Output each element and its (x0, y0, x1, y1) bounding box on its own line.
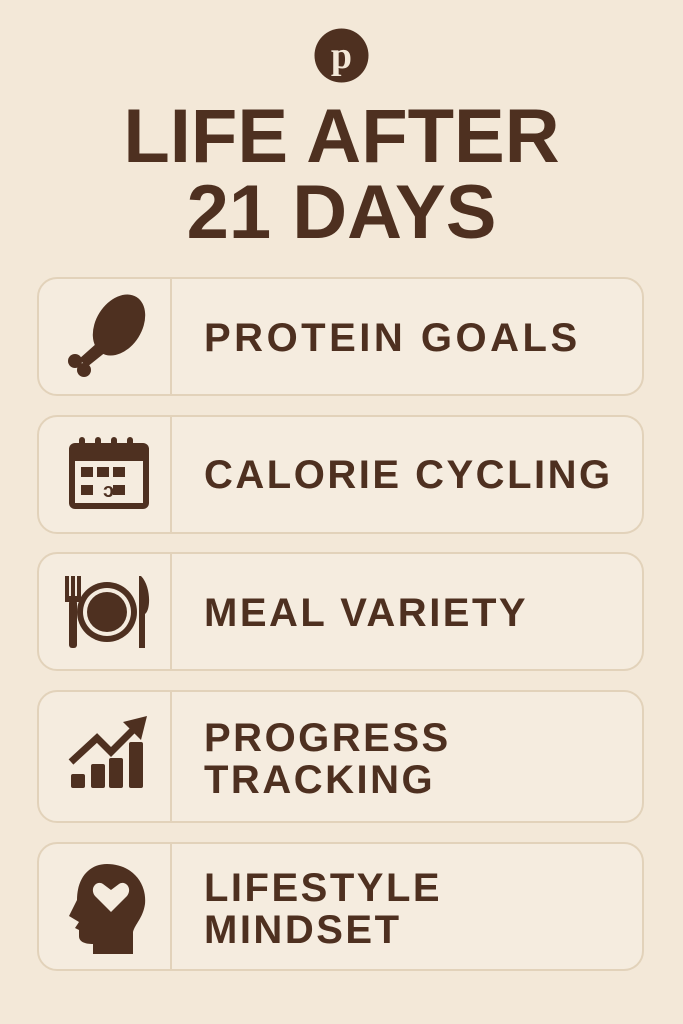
icon: head with heart (69, 864, 146, 954)
panel: lifestyle mindset (37, 842, 644, 971)
icon: pinterest logo (314, 28, 368, 82)
icon: calendar: ↄ (103, 480, 114, 502)
panel: meal variety (37, 552, 644, 671)
panel: calorie cycling: CALORIE CYCLING (204, 453, 613, 497)
panel: progress tracking: TRACKING (204, 758, 435, 802)
panel: meal variety: MEAL VARIETY (204, 591, 528, 635)
panel: protein goals: PROTEIN GOALS (204, 316, 581, 360)
icon: drumstick (68, 294, 146, 377)
title: LIFE AFTER (123, 94, 560, 179)
icon: calendar (69, 437, 149, 509)
panel: progress tracking (37, 690, 644, 823)
panel: protein goals (37, 277, 644, 396)
title: 21 DAYS (187, 170, 496, 255)
icon: pinterest logo: p (331, 35, 352, 77)
panel: lifestyle mindset: LIFESTYLE (204, 866, 442, 910)
panel: progress tracking: PROGRESS (204, 716, 451, 760)
panel: lifestyle mindset: MINDSET (204, 908, 402, 952)
panel: calorie cycling (37, 415, 644, 534)
icon: plate with fork and knife (65, 576, 150, 648)
icon: chart trend (68, 716, 147, 788)
title (123, 94, 560, 255)
